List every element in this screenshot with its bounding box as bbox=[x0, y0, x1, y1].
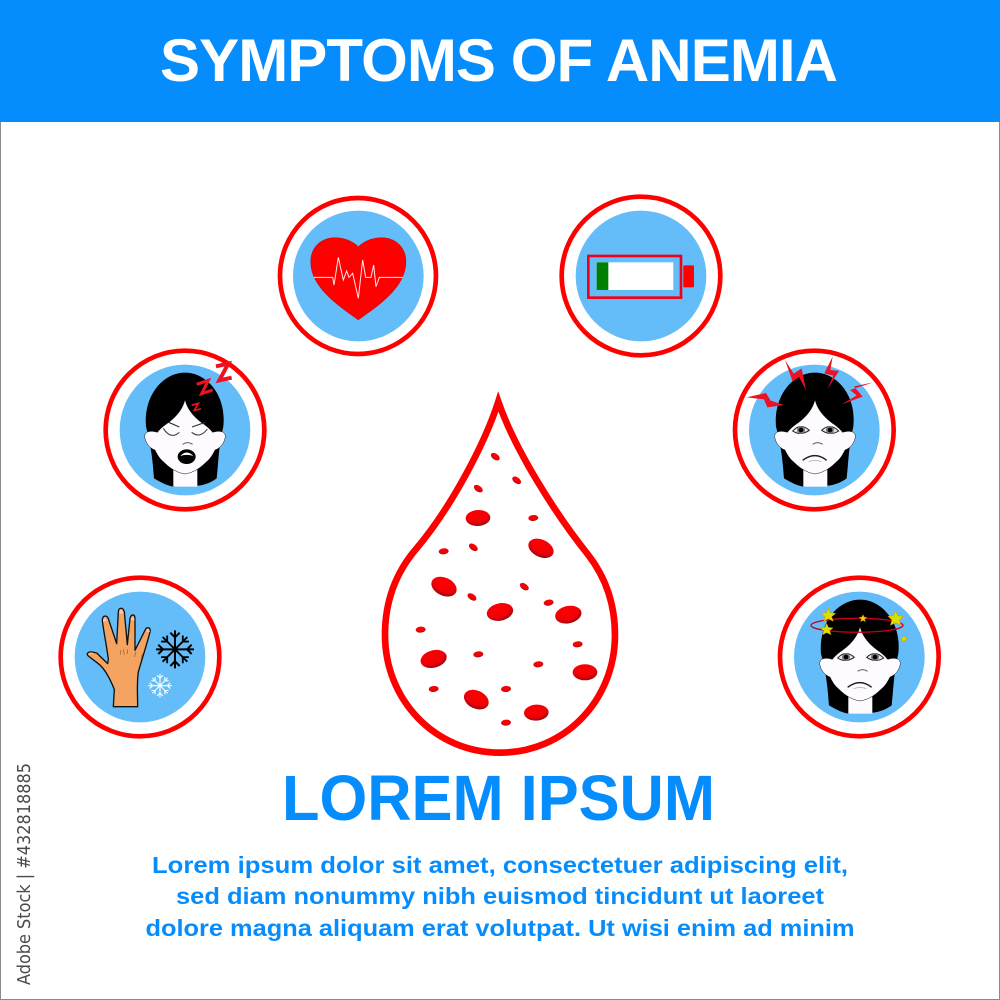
drop outline bbox=[385, 402, 615, 753]
subheading: LOREM IPSUM bbox=[282, 762, 715, 834]
side stock credit: Adobe Stock | #432818885 bbox=[14, 763, 35, 985]
icon: dizzy ring and stars bbox=[811, 608, 908, 642]
panel: fatigue and sleepiness bbox=[106, 351, 264, 509]
body text: sed diam nonummy nibh euismod tincidunt ut laoreet bbox=[176, 883, 824, 909]
icon: sleepy face bbox=[145, 373, 225, 487]
header banner bbox=[0, 0, 1000, 122]
body text: Lorem ipsum dolor sit amet, consectetuer adipiscing elit, bbox=[152, 852, 848, 878]
title: SYMPTOMS OF ANEMIA bbox=[160, 27, 838, 94]
icon: hand bbox=[87, 608, 150, 707]
icon: worried face bbox=[775, 373, 855, 487]
panel: headache bbox=[735, 351, 894, 509]
panel: low energy battery bbox=[562, 197, 720, 355]
icon: sleep Z letters bbox=[192, 364, 232, 410]
icon: low battery bbox=[588, 256, 694, 298]
panel: cold hands bbox=[61, 578, 219, 736]
icon: black snowflake bbox=[156, 630, 194, 668]
blood drop with red cells bbox=[385, 402, 615, 753]
icon: headache lightning bolts bbox=[747, 357, 873, 407]
panel: rapid heartbeat bbox=[280, 198, 436, 354]
body text: dolore magna aliquam erat volutpat. Ut wisi enim ad minim bbox=[146, 915, 854, 941]
large red cells bbox=[419, 509, 597, 721]
icon: worried face bbox=[820, 600, 900, 714]
body text bbox=[146, 852, 854, 941]
small red cells bbox=[415, 451, 583, 726]
icon: white snowflake bbox=[148, 674, 172, 697]
panel: dizziness bbox=[780, 578, 939, 736]
icon: heart with pulse line bbox=[311, 238, 406, 320]
